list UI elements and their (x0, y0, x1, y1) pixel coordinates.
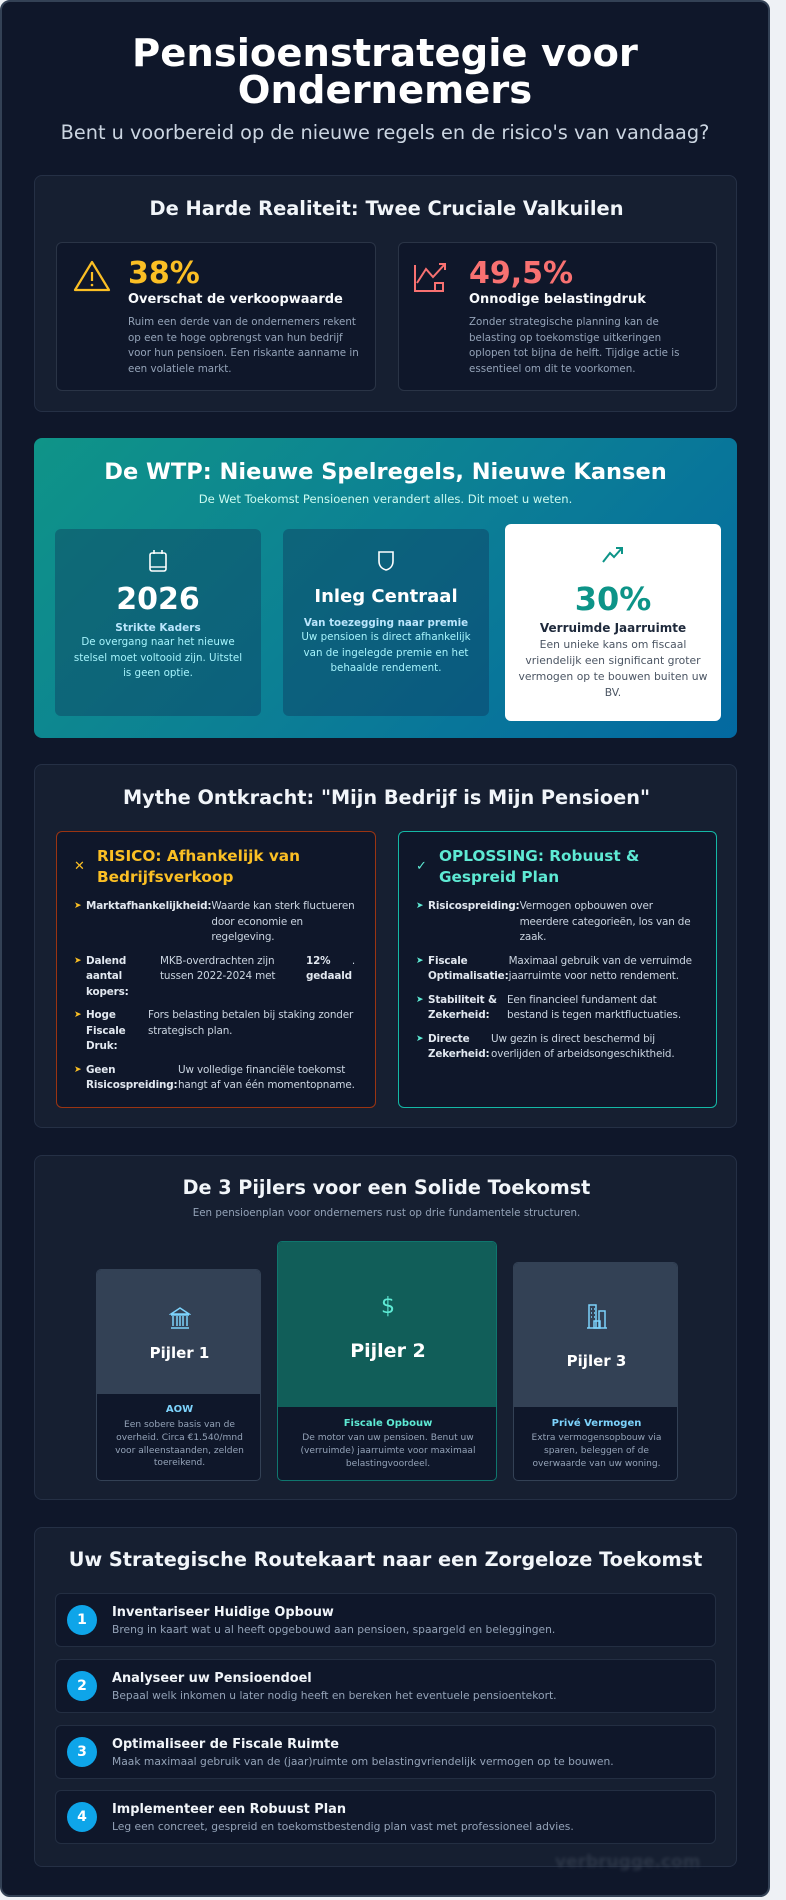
text: Een sobere basis van de overheid. Circa €1.540/mnd voor alleenstaanden, zelden toereikend. (115, 1420, 244, 1468)
list: oplossing items: Stabiliteit & Zekerheid: (428, 994, 497, 1021)
heading: Inleg Centraal (314, 586, 458, 607)
title (132, 31, 638, 113)
icon: trend (602, 547, 623, 563)
stat: 49,5% (469, 256, 573, 291)
label: AOW: AOW (166, 1404, 193, 1415)
list: risico items: Fors belasting betalen bij staking zonder strategisch plan. (148, 1009, 353, 1036)
list: oplossing items: Fiscale Optimalisatie: (428, 954, 509, 982)
heading: De 3 Pijlers voor een Solide Toekomst (183, 1176, 590, 1199)
label: Pijler 1 (150, 1344, 209, 1362)
list: oplossing items: Directe Zekerheid: (428, 1032, 489, 1060)
list: risico items: ➤ (74, 1010, 81, 1020)
step 2 (55, 1659, 716, 1713)
text: Ruim een derde van de ondernemers rekent op een te hoge opbrengst van hun bedrijf voor hun pensioen. Een riskante aanname in een volatiele markt. (128, 316, 359, 374)
panel: routekaart (34, 1527, 737, 1867)
list: risico items: Dalend aantal kopers: (86, 954, 129, 998)
list: oplossing items: ➤ (416, 956, 423, 966)
list: oplossing items: Een financieel fundament dat bestand is tegen marktfluctuaties. (507, 994, 681, 1021)
list: oplossing items: ➤ (416, 901, 423, 911)
list: risico items: Geen Risicospreiding: (86, 1064, 178, 1091)
card: 2026 (55, 529, 261, 716)
icon: building (587, 1304, 607, 1329)
stat: 38% (128, 256, 200, 291)
pillar 1 (96, 1269, 261, 1481)
heading: risico (74, 847, 300, 886)
watermark: verbrugge.com (555, 1852, 700, 1872)
list: oplossing items: Vermogen opbouwen over meerdere categorieën, los van de zaak. (520, 900, 690, 943)
heading: Mythe Ontkracht: "Mijn Bedrijf is Mijn Pensioen" (123, 786, 650, 809)
step 2: Analyseer uw Pensioendoel (112, 1671, 312, 1686)
list: oplossing items: Uw gezin is direct beschermd bij overlijden of arbeidsongeschiktheid. (491, 1032, 675, 1060)
subheading: Overschat de verkoopwaarde (128, 292, 343, 307)
pillar 2 (277, 1241, 497, 1481)
subtitle: Bent u voorbereid op de nieuwe regels en de risico's van vandaag? (61, 121, 709, 144)
card: 30% (505, 524, 721, 721)
list: risico items: ➤ (74, 901, 81, 911)
heading: oplossing (416, 847, 639, 886)
heading text: Bedrijfsverkoop (97, 868, 233, 886)
card: 49,5% (398, 242, 717, 391)
list: risico items: Marktafhankelijkheid: (86, 900, 211, 912)
subheading: Een pensioenplan voor ondernemers rust op drie fundamentele structuren. (193, 1207, 580, 1219)
step 3: Optimaliseer de Fiscale Ruimte (112, 1737, 339, 1752)
step 4: Leg een concreet, gespreid en toekomstbestendig plan vast met professioneel advies. (112, 1820, 574, 1833)
text: Zonder strategische planning kan de belasting op toekomstige uitkeringen oplopen tot bijna de helft. Tijdige actie is essentieel om dit te voorkomen. (469, 316, 680, 374)
heading text: OPLOSSING: Robuust & (439, 847, 639, 865)
panel: 3 pijlers (34, 1155, 737, 1500)
icon: cross: ✕ (74, 859, 85, 874)
title: Ondernemers (238, 68, 532, 113)
step 3: Maak maximaal gebruik van de (jaar)ruimte om belastingvriendelijk vermogen op te bouwen. (112, 1755, 614, 1768)
box: oplossing (398, 831, 717, 1108)
label: fiscale opbouw: Fiscale Opbouw (344, 1418, 432, 1429)
list: oplossing items: ➤ (416, 994, 423, 1004)
step 3: 3 (77, 1744, 87, 1760)
step 4: Implementeer een Robuust Plan (112, 1802, 346, 1817)
label: Van toezegging naar premie (304, 617, 468, 629)
title: Pensioenstrategie voor (132, 31, 638, 76)
step 2: 2 (77, 1678, 87, 1694)
icon: check: ✓ (416, 859, 427, 874)
list: risico items: . (352, 954, 355, 966)
step 1: Breng in kaart wat u al heeft opgebouwd aan pensioen, spaargeld en beleggingen. (112, 1623, 555, 1636)
text: Extra vermogensopbouw via sparen, beleggen of de overwaarde van uw woning. (532, 1433, 662, 1469)
text: De overgang naar het nieuwe stelsel moet voltooid zijn. Uitstel is geen optie. (74, 636, 242, 679)
list: risico items: MKB-overdrachten zijn tussen 2022-2024 met (160, 954, 275, 982)
label: Pijler 3 (567, 1352, 626, 1370)
icon: bank (169, 1307, 191, 1329)
text: Een unieke kans om fiscaal vriendelijk een significant groter vermogen op te bouwen buiten uw BV. (519, 638, 707, 699)
heading: De WTP: Nieuwe Spelregels, Nieuwe Kansen (104, 459, 667, 485)
list: risico items: ➤ (74, 1064, 81, 1074)
step 4 (55, 1790, 716, 1844)
card: 38% (56, 242, 376, 391)
panel: mythe ontkracht (34, 764, 737, 1128)
icon: dollar: $ (381, 1294, 395, 1319)
icon: warning (74, 260, 110, 292)
step 1: Inventariseer Huidige Opbouw (112, 1605, 334, 1620)
list: oplossing items (416, 900, 692, 1060)
box: risico (56, 831, 376, 1108)
subheading: Onnodige belastingdruk (469, 292, 646, 307)
list: risico items: Waarde kan sterk fluctueren door economie en regelgeving. (211, 900, 355, 943)
panel: harde realiteit (34, 175, 737, 412)
label: Strikte Kaders (115, 622, 201, 634)
icon: shield (378, 551, 394, 571)
list: risico items: ➤ (74, 956, 81, 966)
list: risico items (74, 900, 355, 1091)
card: inleg centraal (283, 529, 489, 716)
list: risico items: Hoge Fiscale Druk: (86, 1009, 126, 1052)
step 1: 1 (77, 1612, 87, 1628)
heading text (439, 847, 639, 886)
list: risico items: 12% gedaald (306, 954, 352, 982)
heading: De Harde Realiteit: Twee Cruciale Valkuilen (149, 197, 624, 220)
step 3 (55, 1725, 716, 1779)
list: oplossing items: ➤ (416, 1034, 423, 1044)
label: privé vermogen: Privé Vermogen (552, 1418, 641, 1429)
panel: WTP (34, 438, 737, 738)
list: oplossing items: Risicospreiding: (428, 900, 520, 912)
heading: routekaart: Uw Strategische Routekaart naar een Zorgeloze Toekomst (69, 1548, 702, 1571)
step 4: 4 (77, 1809, 87, 1825)
text: De motor van uw pensioen. Benut uw (verruimde) jaarruimte voor maximaal belastingvoordeel. (300, 1433, 476, 1469)
label: Verruimde Jaarruimte (540, 621, 686, 635)
list: risico items: Uw volledige financiële toekomst hangt af van één momentopname. (178, 1064, 355, 1091)
icon: calendar (149, 550, 167, 572)
stat: 30% (575, 580, 651, 618)
stat: 2026 (116, 582, 200, 617)
step 2: Bepaal welk inkomen u later nodig heeft en bereken het eventuele pensioentekort. (112, 1689, 557, 1702)
heading text: Gespreid Plan (439, 868, 559, 886)
pillar 3 (513, 1262, 678, 1481)
heading text: RISICO: Afhankelijk van (97, 847, 300, 865)
icon: chart (414, 263, 446, 292)
heading text (97, 847, 300, 886)
list: oplossing items: Maximaal gebruik van de verruimde jaarruimte voor netto rendement. (509, 954, 692, 982)
step 1 (55, 1593, 716, 1647)
label: Pijler 2 (350, 1340, 426, 1362)
text: Uw pensioen is direct afhankelijk van de ingelegde premie en het behaalde rendement. (301, 631, 471, 674)
subheading: De Wet Toekomst Pensioenen verandert alles. Dit moet u weten. (199, 492, 572, 506)
